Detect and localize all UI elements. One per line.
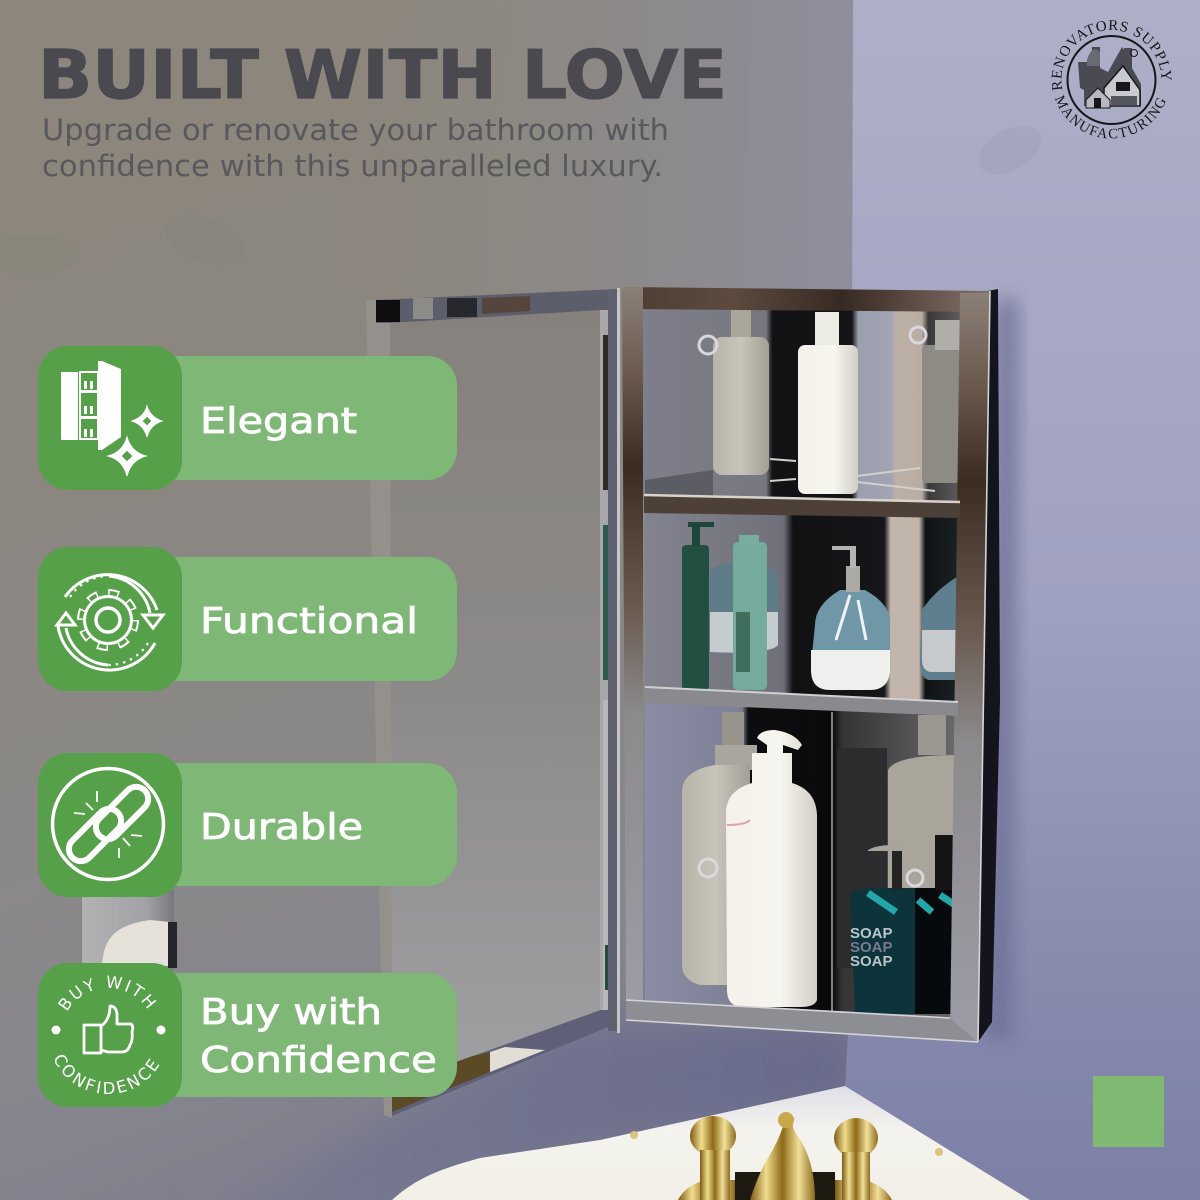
cabinet black side edge <box>978 289 1000 1042</box>
sink <box>392 1086 1030 1200</box>
label: Buy with <box>200 992 382 1033</box>
open mirror door <box>366 288 620 1118</box>
dark teal soap bottles: SOAP <box>850 953 893 970</box>
cabinet lower compartment <box>645 702 958 1018</box>
white pump bottle <box>726 730 817 1007</box>
icon tile <box>38 547 182 691</box>
icon tile <box>38 963 182 1107</box>
door left edge strip <box>366 300 392 1118</box>
icon: gear with cycle arrows <box>57 575 163 670</box>
reflected jar <box>920 575 960 680</box>
feature: Elegant <box>38 346 457 490</box>
pill <box>150 356 457 480</box>
logo house <box>1078 47 1141 108</box>
icon: buy with confidence badge: BUY WITH <box>58 976 156 1011</box>
cabinet right stile <box>950 293 990 1042</box>
door top band <box>376 289 618 323</box>
subtitle: confidence with this unparalleled luxury. <box>42 149 663 183</box>
door bottom reflection <box>392 1008 620 1116</box>
dark teal soap bottles <box>850 835 955 1014</box>
decorative leaf pattern <box>0 116 1049 1006</box>
subtitle <box>42 113 669 183</box>
SOAP labels: SOAP <box>850 925 893 942</box>
title: BUILT WITH LOVE <box>38 36 727 114</box>
green accent square <box>1093 1076 1164 1147</box>
subtitle: Upgrade or renovate your bathroom with <box>42 113 669 147</box>
background: shaded lower wall <box>200 1020 860 1200</box>
gray bottle <box>713 310 769 475</box>
mirror knobs <box>699 327 926 354</box>
logo ring <box>1068 36 1156 124</box>
icon tile <box>38 346 182 490</box>
cabinet middle compartment <box>645 512 960 702</box>
pill <box>150 763 457 886</box>
feature: Durable <box>38 753 457 897</box>
logo text top: RENOVATORS SUPPLY <box>1052 20 1172 91</box>
reflected bottle <box>922 320 960 483</box>
icon: chain link in circle <box>52 768 164 880</box>
icon tile <box>38 753 182 897</box>
reflected gray bottle right <box>837 715 958 968</box>
shelf reflection <box>645 470 713 497</box>
label: Durable <box>200 807 363 848</box>
background: cabinet wall shadow <box>985 300 1018 1040</box>
logo: Renovators Supply Manufacturing <box>1052 20 1172 138</box>
open cabinet <box>622 287 1000 1042</box>
cabinet top rail <box>622 287 990 312</box>
label: Functional <box>200 601 418 642</box>
pill <box>150 557 457 681</box>
label: Confidence <box>200 1040 437 1081</box>
label: Elegant <box>200 401 357 442</box>
faucet <box>630 1112 943 1200</box>
cabinet upper compartment <box>642 308 960 502</box>
center mirror divider <box>831 712 833 1012</box>
dark teal soap bottles: SOAP <box>850 939 893 956</box>
icon: open cabinet with sparkles <box>61 361 162 476</box>
mint green bottle <box>733 535 767 690</box>
background: right wall <box>845 0 1200 1200</box>
upper shelf bottles <box>645 310 960 497</box>
pill <box>150 973 457 1097</box>
reflected gray bottle <box>682 712 757 985</box>
wall pipe <box>82 890 177 970</box>
mirror knobs <box>699 859 923 886</box>
shelf one <box>644 495 960 518</box>
feature: Buy with Confidence <box>38 963 457 1107</box>
feature: Functional <box>38 547 457 691</box>
mirror clips <box>770 459 935 491</box>
door mirror panel <box>390 310 606 1085</box>
label <box>200 992 437 1081</box>
middle shelf bottles <box>682 522 960 690</box>
icon: buy with confidence badge <box>52 976 166 1094</box>
logo text bottom: MANUFACTURING <box>1054 94 1166 138</box>
lower shelf bottles <box>682 712 958 1014</box>
cabinet left stile <box>622 287 643 1000</box>
white pump bottle <box>798 312 858 494</box>
cabinet bottom rail <box>626 291 990 1042</box>
glass jar behind <box>710 562 779 650</box>
icon: buy with confidence badge: CONFIDENCE <box>55 1055 160 1094</box>
glass soap dispenser <box>811 546 890 690</box>
dark green bottle <box>682 522 714 690</box>
shelf two <box>645 687 958 716</box>
door hinge strip <box>600 288 620 1033</box>
